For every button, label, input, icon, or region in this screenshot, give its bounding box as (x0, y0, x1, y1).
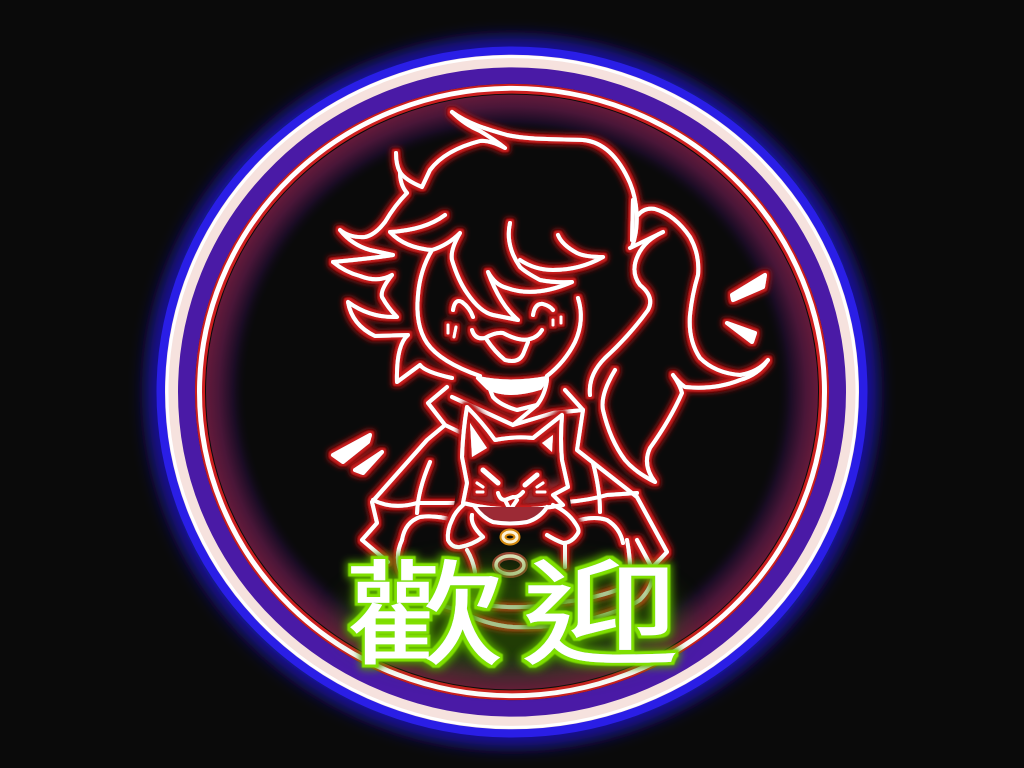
cat eyes (483, 470, 537, 485)
ponytail (590, 200, 768, 482)
cat whiskers (477, 483, 545, 492)
ring: blue band (161, 51, 863, 733)
ring: purple band (186, 75, 838, 709)
ring: inner maroon gradient (206, 95, 818, 689)
cat lower body (467, 543, 565, 572)
cat head outline (462, 407, 568, 510)
character (333, 112, 768, 627)
action lines left (333, 435, 382, 473)
cat (448, 407, 579, 572)
arms and legs (398, 516, 653, 627)
freckles (448, 317, 561, 337)
ring: outer blue glow (158, 48, 866, 736)
cat silhouette backing (450, 407, 575, 530)
ring: pink white band (172, 61, 852, 723)
cat ears (470, 423, 553, 457)
cat right paw (547, 505, 579, 543)
action lines right (727, 275, 765, 342)
lower bell ring glow (496, 556, 524, 574)
cat collar (475, 507, 547, 524)
ring: thin white line (200, 88, 824, 696)
lower bell ring (496, 556, 524, 574)
eyes (453, 301, 553, 317)
chin and neck fill (478, 378, 547, 393)
neon ring (158, 48, 866, 736)
bell rings (496, 532, 524, 574)
cat left paw (448, 505, 483, 547)
ring: white outer edge (167, 57, 857, 727)
green glow behind text (342, 563, 682, 673)
title text: welcome: 歡迎 (346, 553, 679, 680)
cat muzzle (498, 492, 523, 510)
orange bell ring glow (503, 532, 517, 542)
orange bell ring (503, 532, 517, 542)
face (417, 250, 581, 376)
shirt and collar (362, 380, 667, 570)
fringe (390, 215, 603, 320)
hair outline (333, 112, 637, 382)
cat cheek tint (468, 478, 562, 511)
mouth (472, 330, 542, 361)
ring: thin red edge (200, 89, 824, 695)
